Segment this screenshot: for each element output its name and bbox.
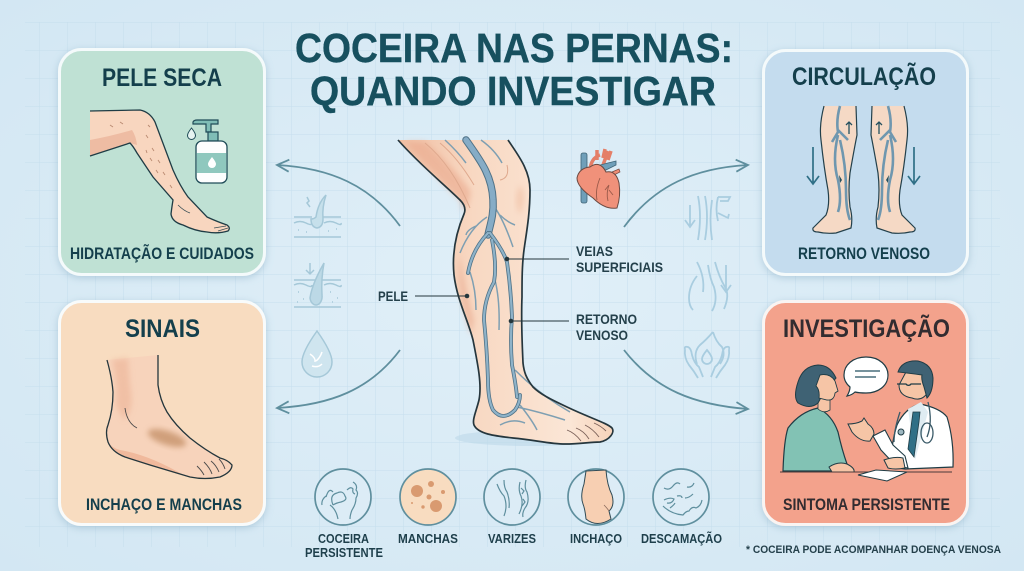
- thin veins: [445, 140, 570, 430]
- icon: skin with arrow: [294, 263, 341, 307]
- arrow: left down: [807, 147, 819, 184]
- heading: investigação: INVESTIGAÇÃO: [783, 313, 950, 343]
- illustration: patient: [783, 365, 854, 472]
- heading: circulação: CIRCULAÇÃO: [792, 61, 936, 91]
- label: COCEIRA: [318, 531, 370, 546]
- icon: heart: [577, 149, 620, 208]
- icon: lotion bottle: [188, 120, 227, 183]
- title: [295, 25, 733, 114]
- illustration: doctor: [848, 361, 953, 469]
- caption: sintoma persistente: SINTOMA PERSISTENTE: [783, 495, 950, 514]
- panel: investigação: [764, 302, 968, 524]
- symptom: coceira persistente: PERSISTENTE: [305, 545, 383, 560]
- arrow: right down: [908, 147, 920, 184]
- icons: skin layers column: [294, 195, 341, 377]
- leg shape: [398, 140, 613, 444]
- caption: hidratação e cuidados: HIDRATAÇÃO E CUIDADOS: [70, 243, 254, 263]
- icon: bent leg with dry skin: [90, 110, 229, 233]
- main veins: [466, 140, 520, 416]
- label: DESCAMAÇÃO: [641, 531, 722, 546]
- label: INCHAÇO: [570, 531, 622, 546]
- icon: hands with flame: [685, 332, 729, 378]
- panel: circulação: [764, 50, 968, 274]
- label: retorno venoso: [509, 311, 637, 343]
- title: QUANDO INVESTIGAR: [310, 68, 716, 114]
- icon: swollen foot with stains: [106, 355, 232, 478]
- panel: pele seca: [60, 50, 264, 274]
- caption: retorno venoso: RETORNO VENOSO: [798, 244, 930, 263]
- symptom: manchas: [398, 469, 458, 546]
- arrow: to pele seca: [277, 165, 400, 226]
- symptom: descamação: [641, 469, 722, 546]
- icons: circulation column: [685, 196, 731, 378]
- symptom: inchaço: [568, 469, 624, 546]
- label: retorno venoso: RETORNO: [576, 311, 637, 327]
- label: pele: [378, 288, 469, 304]
- label: MANCHAS: [398, 531, 458, 546]
- title: COCEIRA NAS PERNAS:: [295, 25, 733, 71]
- label: veias superficiais: VEIAS: [576, 243, 613, 259]
- illustration: speech bubble: [844, 357, 888, 396]
- icon: two legs with veins: [813, 106, 915, 233]
- thigh and knee shading: [405, 142, 470, 212]
- icon: water drop: [302, 331, 332, 377]
- label: pele: PELE: [378, 288, 408, 304]
- icon: vein branch: [685, 196, 730, 240]
- label: VARIZES: [488, 531, 536, 546]
- label: veias superficiais: SUPERFICIAIS: [576, 259, 663, 275]
- icon: varicose veins: [689, 262, 731, 311]
- footnote: * COCEIRA PODE ACOMPANHAR DOENÇA VENOSA: [746, 544, 1001, 556]
- symptom: varizes: [484, 469, 540, 546]
- icon: hair follicle: [294, 195, 341, 237]
- illustration: table and clipboard: [780, 470, 952, 481]
- heading: pele seca: PELE SECA: [102, 64, 222, 92]
- illustration: central leg: [398, 140, 613, 446]
- symptoms row: [305, 469, 722, 560]
- symptom: coceira persistente: [305, 469, 383, 560]
- caption: inchaço e manchas: INCHAÇO E MANCHAS: [86, 495, 242, 514]
- arrow: to investigação: [624, 350, 748, 409]
- heading: sinais: SINAIS: [125, 315, 200, 343]
- arrow: to sinais: [277, 350, 400, 408]
- toes: [567, 423, 606, 441]
- arrow: to circulação: [624, 165, 748, 227]
- leg outline: [398, 140, 613, 444]
- label: veias superficiais: [505, 243, 663, 275]
- panel: sinais: [60, 302, 264, 524]
- label: retorno venoso: VENOSO: [576, 327, 628, 343]
